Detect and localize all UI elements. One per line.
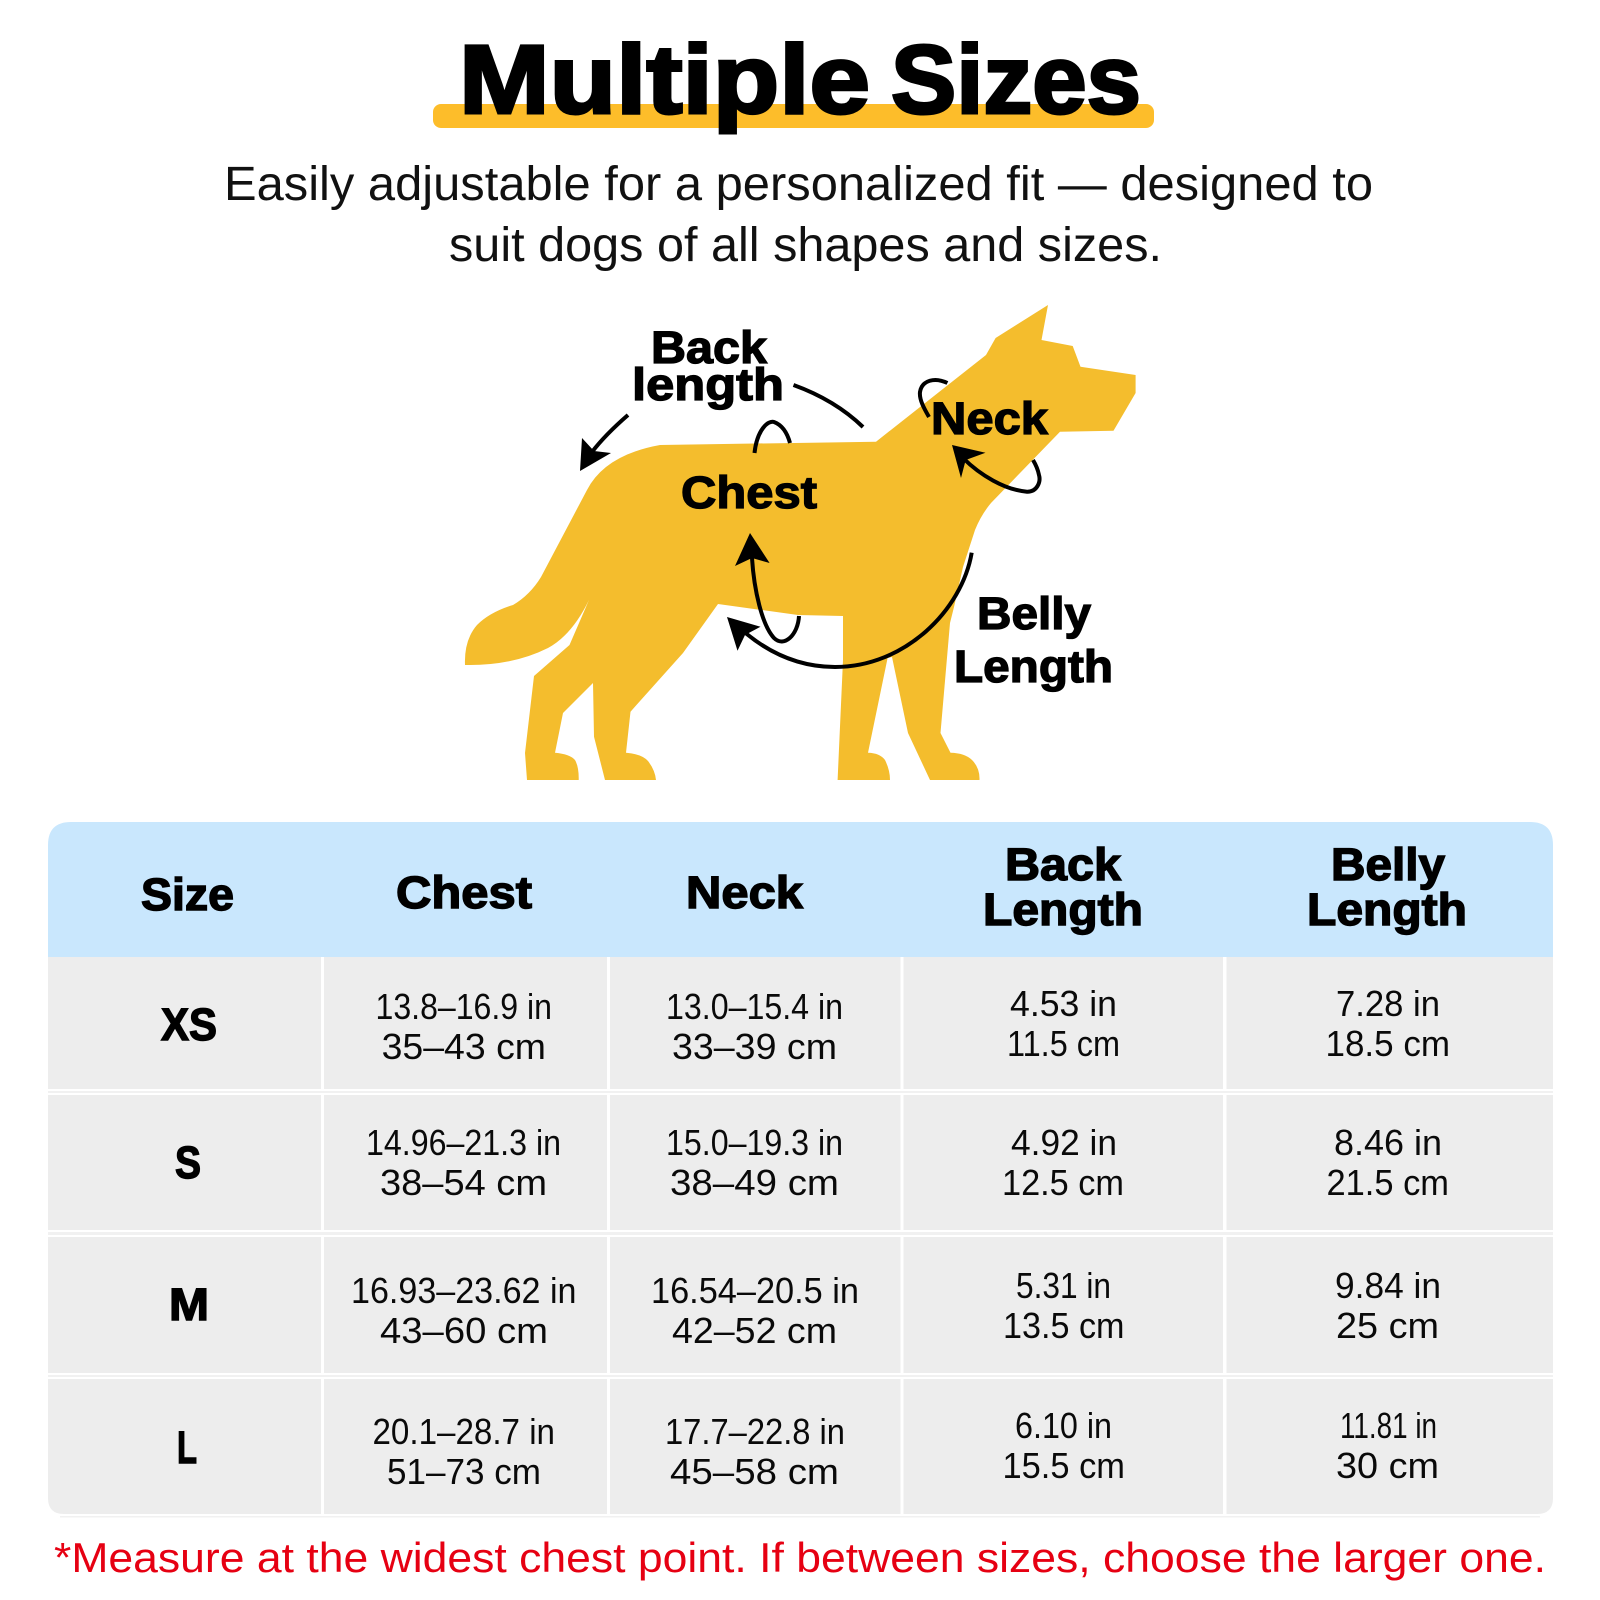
table header: Length bbox=[1307, 884, 1467, 935]
dog silhouette bbox=[465, 305, 1136, 780]
arrow: back length bbox=[580, 385, 863, 471]
row: M: 9.84 in bbox=[1335, 1265, 1441, 1306]
row: S: 4.92 in bbox=[1011, 1122, 1117, 1163]
title highlight bar bbox=[433, 104, 1154, 128]
row: XS: 18.5 cm bbox=[1326, 1023, 1450, 1064]
label: back length: length bbox=[632, 359, 784, 410]
row: XS: 11.5 cm bbox=[1007, 1023, 1120, 1064]
row: L: 45–58 cm bbox=[670, 1451, 839, 1492]
table header: Chest bbox=[396, 867, 532, 918]
row: S: 15.0–19.3 in bbox=[666, 1122, 843, 1163]
row: XS: 7.28 in bbox=[1336, 983, 1440, 1024]
row: L: 6.10 in bbox=[1015, 1405, 1112, 1446]
title text: Sizes bbox=[891, 25, 1141, 134]
table header bbox=[48, 822, 1553, 957]
row: L: 20.1–28.7 in bbox=[372, 1411, 555, 1452]
subtitle: Easily adjustable for a personalized fit — designed to bbox=[224, 158, 1373, 211]
row: M: 5.31 in bbox=[1016, 1265, 1111, 1306]
table header: Back bbox=[1005, 839, 1122, 890]
row: L bbox=[177, 1405, 1439, 1492]
arrow: chest bbox=[735, 422, 799, 641]
row: M: 16.54–20.5 in bbox=[651, 1270, 859, 1311]
row: XS: XS bbox=[161, 999, 217, 1050]
label: belly length: Belly bbox=[977, 588, 1091, 639]
row: S bbox=[175, 1122, 1449, 1203]
row: L: 17.7–22.8 in bbox=[665, 1411, 845, 1452]
row: S: S bbox=[175, 1137, 201, 1188]
arrow: neck bbox=[920, 380, 1040, 492]
label: neck: Neck bbox=[931, 393, 1049, 444]
row: S: 38–54 cm bbox=[380, 1162, 547, 1203]
row: XS: 35–43 cm bbox=[382, 1026, 546, 1067]
row: S: 14.96–21.3 in bbox=[366, 1122, 561, 1163]
row: M: M bbox=[169, 1279, 209, 1330]
row: XS: 4.53 in bbox=[1010, 983, 1117, 1024]
row: S: 8.46 in bbox=[1334, 1122, 1442, 1163]
row: S: 21.5 cm bbox=[1326, 1162, 1449, 1203]
table body background bbox=[48, 957, 1553, 1514]
title text: Multiple bbox=[459, 25, 870, 134]
row: L: 30 cm bbox=[1336, 1445, 1439, 1486]
arrow: belly length bbox=[727, 553, 972, 667]
row: M bbox=[169, 1265, 1441, 1351]
row: M: 13.5 cm bbox=[1003, 1305, 1124, 1346]
size table bbox=[48, 822, 1553, 1518]
row: XS: 13.8–16.9 in bbox=[376, 986, 552, 1027]
row: M: 43–60 cm bbox=[380, 1310, 548, 1351]
table header: Length bbox=[983, 884, 1143, 935]
measurement diagram bbox=[465, 305, 1136, 780]
table header: Size bbox=[141, 869, 234, 920]
title with highlight bbox=[433, 25, 1154, 134]
subtitle: suit dogs of all shapes and sizes. bbox=[449, 219, 1162, 272]
label: back length: Back bbox=[651, 322, 768, 373]
row: XS: 13.0–15.4 in bbox=[666, 986, 843, 1027]
row: M: 25 cm bbox=[1336, 1305, 1439, 1346]
label: belly length: Length bbox=[954, 641, 1113, 692]
row: M: 42–52 cm bbox=[672, 1310, 837, 1351]
label: belly length bbox=[954, 588, 1113, 692]
label: back length bbox=[632, 322, 784, 410]
row: L: 51–73 cm bbox=[387, 1451, 541, 1492]
table header: Belly bbox=[1331, 839, 1445, 890]
row: XS bbox=[161, 983, 1450, 1067]
subtitle bbox=[224, 158, 1373, 272]
title text bbox=[459, 25, 1141, 134]
row: S: 38–49 cm bbox=[670, 1162, 839, 1203]
row: M: 16.93–23.62 in bbox=[351, 1270, 576, 1311]
table header: Neck bbox=[686, 867, 804, 918]
row: L: 15.5 cm bbox=[1002, 1445, 1125, 1486]
row: S: 12.5 cm bbox=[1002, 1162, 1124, 1203]
row: L: 11.81 in bbox=[1340, 1405, 1437, 1446]
footnote: *Measure at the widest chest point. If between sizes, choose the larger one. bbox=[54, 1534, 1546, 1581]
row: L: L bbox=[177, 1422, 197, 1473]
row: XS: 33–39 cm bbox=[672, 1026, 837, 1067]
label: chest: Chest bbox=[681, 467, 817, 518]
